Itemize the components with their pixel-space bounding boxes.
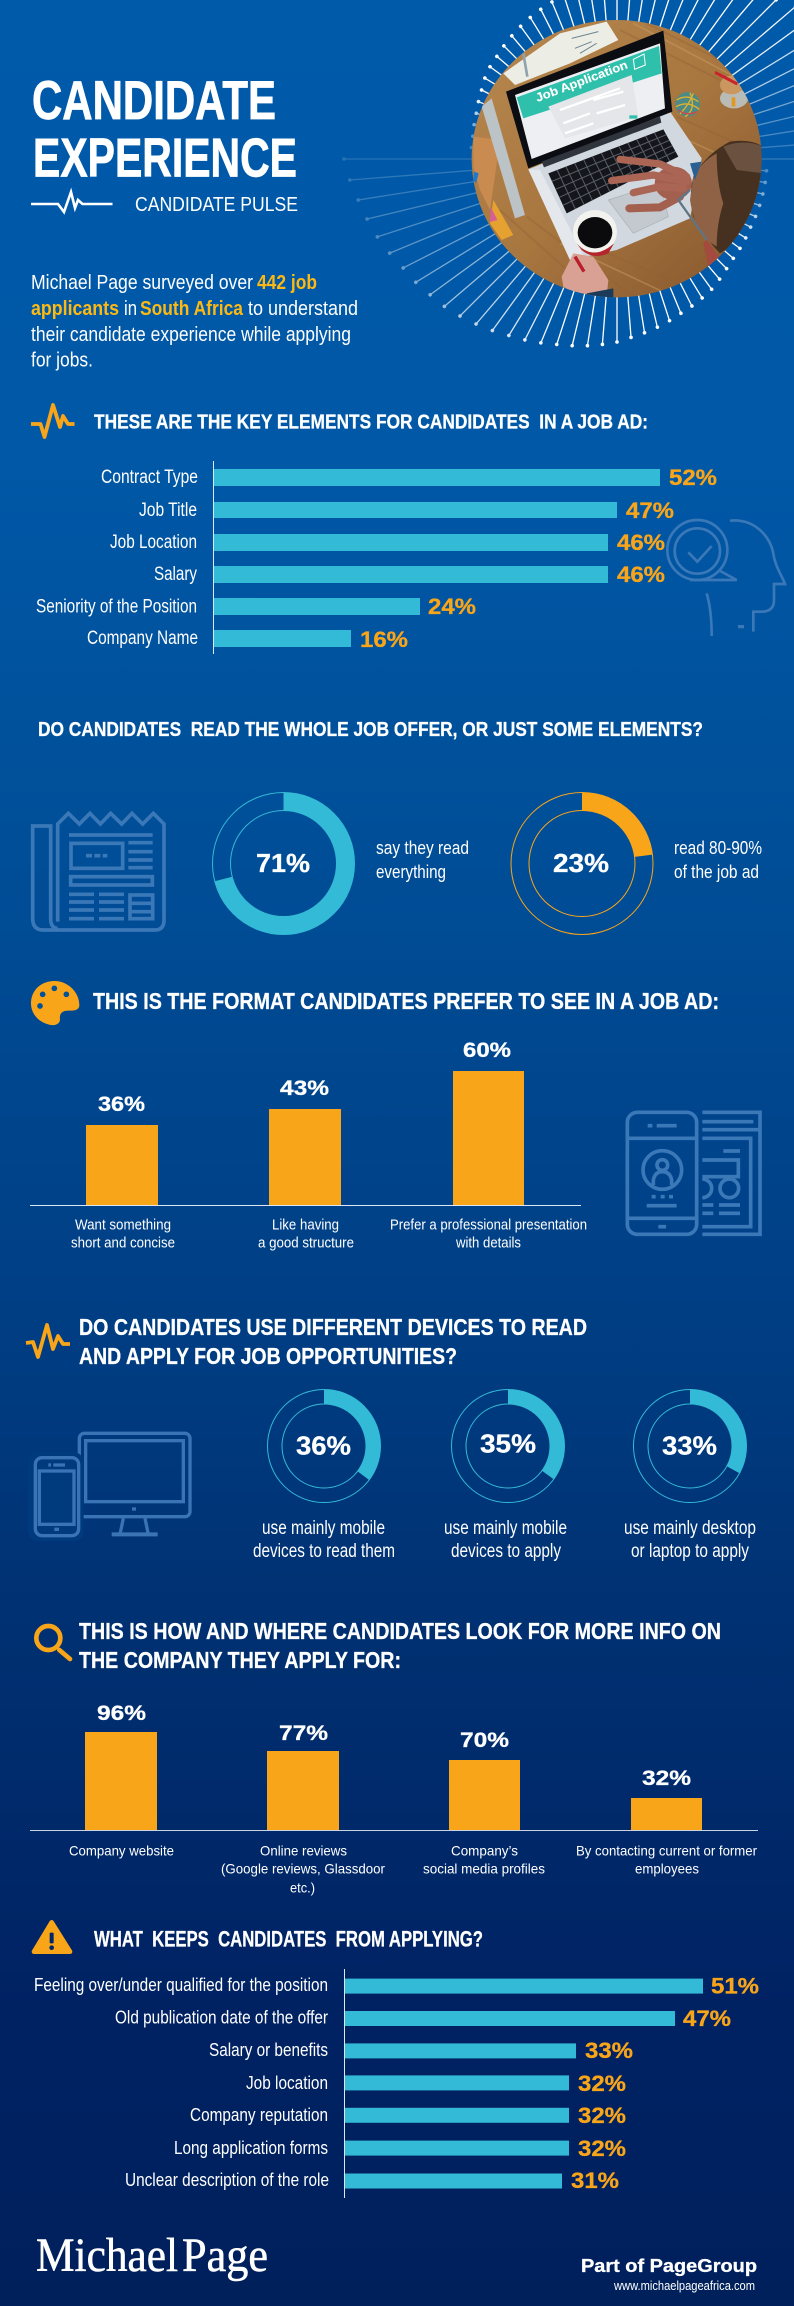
- bar chart: Old publication date of the offer: [115, 2008, 328, 2028]
- bar chart: 52%: [669, 465, 717, 490]
- bar chart: Want something: [75, 1217, 171, 1234]
- bar chart: Company website: [69, 1842, 174, 1858]
- bar chart: etc.): [290, 1880, 315, 1896]
- bar chart: Job location: [246, 2073, 328, 2093]
- title: CANDIDATE: [32, 69, 276, 131]
- bar chart: Long application forms: [174, 2138, 328, 2158]
- title: EXPERIENCE: [33, 126, 297, 188]
- bar chart: Prefer a professional presentation: [390, 1217, 587, 1234]
- intro text: to understand: [248, 298, 358, 320]
- bar chart: 32%: [578, 2071, 626, 2096]
- bar chart: By contacting current or former: [576, 1842, 757, 1858]
- bar chart: 16%: [360, 627, 408, 652]
- icon: magnifying glass: [36, 1626, 70, 1659]
- bar chart: 70%: [460, 1728, 509, 1752]
- heading: THESE ARE THE KEY ELEMENTS FOR CANDIDATES IN A JOB AD:: [94, 411, 648, 434]
- bar chart: 32%: [578, 2136, 626, 2161]
- bar chart: 32%: [578, 2103, 626, 2128]
- intro text: 442 job: [257, 272, 317, 294]
- icon: palette: [31, 981, 79, 1025]
- bar chart: Job Title: [139, 500, 197, 521]
- bar chart: Contract Type: [101, 467, 198, 488]
- donut captions: devices to apply: [451, 1541, 561, 1562]
- bar chart: Job Location: [110, 532, 197, 553]
- footer: part of PageGroup: [581, 2256, 757, 2293]
- bar chart: Salary or benefits: [209, 2040, 328, 2060]
- icon: newspaper: [33, 813, 164, 930]
- donut captions: devices to read them: [253, 1541, 395, 1562]
- donut chart: 35%: 35%: [480, 1428, 536, 1458]
- bar chart: 32%: [642, 1766, 691, 1790]
- panel: key elements in a job ad: [31, 405, 785, 654]
- bar chart: a good structure: [258, 1234, 354, 1252]
- bar chart: Unclear description of the role: [125, 2170, 329, 2190]
- logo: Michael Page: [36, 2229, 268, 2282]
- bar chart: Salary: [154, 564, 197, 585]
- bar chart: employees: [635, 1860, 699, 1876]
- bar chart: 96%: [97, 1701, 146, 1725]
- logo: Michael Page: Page: [182, 2229, 268, 2282]
- donut captions: use mainly mobile: [444, 1518, 567, 1539]
- icon: orange pulse: [26, 1325, 70, 1357]
- panel: read whole job offer: [33, 718, 762, 934]
- bar chart: 60%: [463, 1038, 511, 1062]
- bar chart: 47%: [683, 2006, 731, 2031]
- intro text: South Africa: [140, 298, 244, 320]
- icon: white pulse line: [31, 192, 112, 212]
- heading: [79, 1314, 587, 1369]
- bar chart: [34, 1969, 759, 2198]
- bar chart: short and concise: [71, 1234, 175, 1252]
- donut chart: 23%: [511, 792, 653, 934]
- donut chart: 71%: 71%: [256, 848, 310, 878]
- bar chart: 47%: [626, 498, 674, 523]
- bar chart: Company reputation: [190, 2105, 328, 2125]
- bar chart: [36, 461, 717, 654]
- bar chart: with details: [455, 1234, 521, 1252]
- bar chart: social media profiles: [423, 1860, 545, 1876]
- icon: warning triangle: [34, 1922, 70, 1952]
- panel: devices: [26, 1314, 756, 1562]
- bar chart: 46%: [617, 562, 665, 587]
- intro text: Michael Page surveyed over: [31, 272, 253, 294]
- donut chart: 71%: [212, 792, 354, 934]
- bar chart: 31%: [571, 2168, 619, 2193]
- label: say they read everything: [376, 838, 469, 882]
- bar chart: Seniority of the Position: [36, 596, 197, 618]
- donut captions: [253, 1518, 756, 1562]
- photo: laptop with job application on wooden desk: [472, 20, 762, 298]
- panel: looking for company info: [30, 1618, 758, 1896]
- donut chart: 36%: [268, 1390, 380, 1502]
- heading: THE COMPANY THEY APPLY FOR:: [79, 1647, 401, 1673]
- icon: head with magnifier: [667, 520, 785, 636]
- bar chart: [30, 1701, 758, 1896]
- photo: laptop with job application on wooden desk: Job Application: [533, 58, 630, 105]
- decorative ray burst: [344, 0, 794, 346]
- bar chart: 77%: [279, 1721, 328, 1745]
- subtitle: candidate pulse: [31, 192, 298, 216]
- bar chart: 51%: [711, 1974, 759, 1998]
- bar chart: 43%: [280, 1076, 329, 1100]
- icon: monitor and phone: [30, 1433, 190, 1540]
- bar chart: 33%: [585, 2038, 633, 2063]
- bar chart: Feeling over/under qualified for the position: [34, 1975, 328, 1995]
- label: read 80-90% of the job ad: [674, 838, 762, 882]
- bar chart: Like having: [272, 1217, 339, 1234]
- donut chart: 35%: [452, 1390, 564, 1502]
- bar chart: 46%: [617, 530, 665, 555]
- bar chart: 36%: [98, 1092, 145, 1116]
- donut captions: or laptop to apply: [631, 1541, 749, 1562]
- label: read 80-90% of the job ad: of the job ad: [674, 862, 759, 882]
- title: [32, 69, 297, 188]
- heading: DO CANDIDATES USE DIFFERENT DEVICES TO READ: [79, 1314, 587, 1340]
- donut chart: 36%: 36%: [296, 1430, 351, 1460]
- donut captions: use mainly mobile: [262, 1518, 385, 1539]
- bar chart: Online reviews: [260, 1842, 347, 1858]
- heading: WHAT KEEPS CANDIDATES FROM APPLYING?: [94, 1927, 483, 1952]
- donut chart: 23%: 23%: [553, 848, 609, 878]
- icon: phone and document: [627, 1112, 760, 1234]
- intro text: in: [124, 298, 137, 320]
- intro text: for jobs.: [31, 350, 93, 372]
- icon: orange pulse: [31, 405, 74, 437]
- bar chart: Company’s: [451, 1842, 518, 1858]
- bar chart: Company Name: [87, 628, 198, 649]
- donut chart: 33%: 33%: [662, 1430, 717, 1460]
- intro text: [31, 272, 358, 372]
- heading: AND APPLY FOR JOB OPPORTUNITIES?: [79, 1343, 457, 1369]
- intro text: applicants: [31, 298, 119, 320]
- intro text: their candidate experience while applying: [31, 324, 351, 346]
- donut chart: 33%: [634, 1390, 746, 1502]
- panel: what keeps candidates from applying: [34, 1922, 759, 2198]
- donut captions: use mainly desktop: [624, 1518, 756, 1539]
- heading: [79, 1618, 721, 1673]
- bar chart: 24%: [428, 594, 476, 619]
- bar chart: (Google reviews, Glassdoor: [221, 1860, 385, 1876]
- subtitle: candidate pulse: CANDIDATE PULSE: [135, 194, 298, 216]
- footer: part of PageGroup: Part of PageGroup: [581, 2256, 757, 2276]
- panel: preferred format: [30, 981, 760, 1252]
- footer: part of PageGroup: www.michaelpageafrica.com: [613, 2279, 755, 2293]
- logo: Michael Page: Michael: [36, 2229, 178, 2282]
- label: say they read everything: say they read: [376, 838, 469, 858]
- label: read 80-90% of the job ad: read 80-90%: [674, 838, 762, 858]
- bar chart: [30, 1038, 587, 1252]
- label: say they read everything: everything: [376, 862, 446, 882]
